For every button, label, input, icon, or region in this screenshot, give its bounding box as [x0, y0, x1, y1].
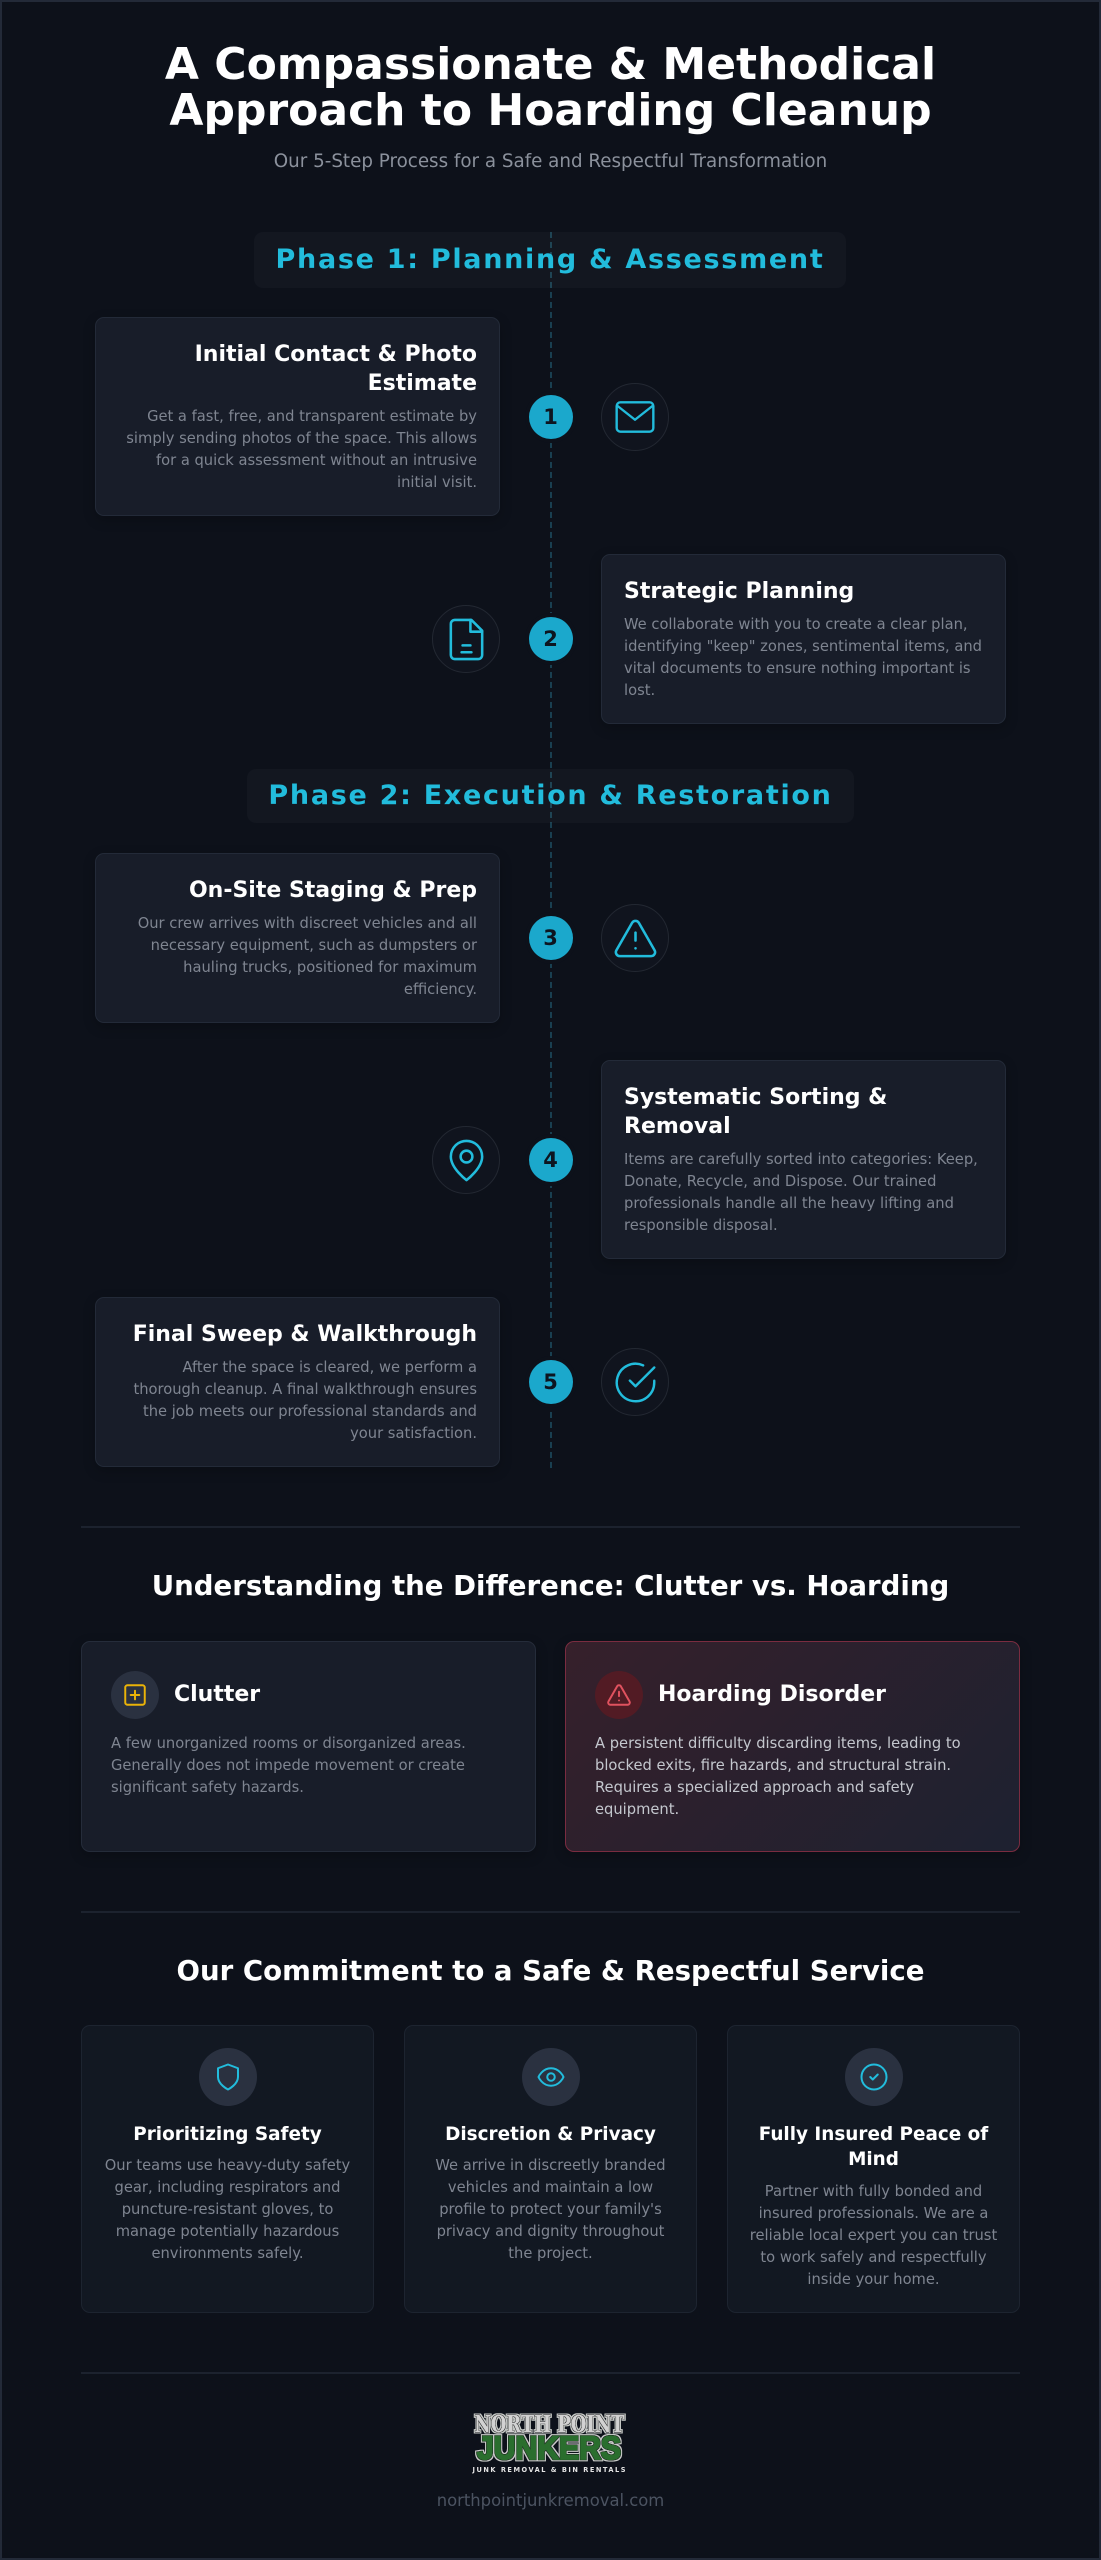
clutter text: Generally does not impede movement or create — [111, 1757, 465, 1774]
step 4 card: professionals handle all the heavy lifting and — [624, 1195, 954, 1212]
panel: clutter — [81, 1641, 536, 1852]
step 2 card: vital documents to ensure nothing important is — [624, 660, 971, 677]
step 3 card — [95, 853, 500, 1023]
step 2 card: We collaborate with you to create a clear plan, — [624, 616, 968, 633]
step 2 card — [601, 554, 1006, 724]
icon: map pin — [432, 1126, 500, 1194]
step 1 card: initial visit. — [397, 474, 477, 491]
discretion text: We arrive in discreetly branded — [435, 2157, 666, 2174]
safety text: Our teams use heavy-duty safety — [105, 2157, 350, 2174]
logo: JUNK REMOVAL & BIN RENTALS — [472, 2466, 626, 2474]
step 5 card: your satisfaction. — [350, 1425, 477, 1442]
discretion heading: Discretion & Privacy — [445, 2124, 656, 2145]
step 4 card: Systematic Sorting & — [624, 1085, 887, 1110]
clutter heading: Clutter — [174, 1682, 260, 1707]
discretion text — [435, 2157, 666, 2262]
timeline dashed line — [550, 232, 552, 1468]
phase 2 heading — [247, 769, 854, 823]
insured heading: Fully Insured Peace of — [759, 2124, 988, 2145]
logo: JUNKERS — [477, 2430, 621, 2466]
step 4 card: responsible disposal. — [624, 1217, 778, 1234]
discretion text: vehicles and maintain a low — [448, 2179, 653, 2196]
step 5 card: the job meets our professional standards and — [143, 1403, 477, 1420]
icon: shield — [198, 2048, 256, 2106]
panel: hoarding disorder — [565, 1641, 1020, 1852]
step 5 card: Final Sweep & Walkthrough — [133, 1322, 477, 1347]
panel: prioritizing safety — [81, 2025, 374, 2313]
step 2 card: identifying "keep" zones, sentimental items, and — [624, 638, 982, 655]
safety text — [105, 2157, 350, 2262]
panel: discretion — [404, 2025, 697, 2313]
insured text: to work safely and respectfully — [760, 2248, 987, 2266]
step 3 card: necessary equipment, such as dumpsters or — [151, 937, 477, 954]
insured heading — [759, 2124, 988, 2170]
logo — [472, 2411, 626, 2474]
step 5 number — [528, 1360, 572, 1404]
step 5 card: After the space is cleared, we perform a — [182, 1359, 477, 1376]
hoarding heading: Hoarding Disorder — [658, 1682, 886, 1707]
step 3 card: efficiency. — [404, 981, 477, 998]
title — [165, 39, 936, 136]
discretion text: privacy and dignity throughout — [437, 2223, 664, 2240]
safety text: environments safely. — [151, 2245, 304, 2262]
heading: commitment: Our Commitment to a Safe & Respectful Service — [177, 1954, 924, 1987]
step 1 card: Initial Contact & Photo — [195, 342, 477, 367]
step 2 card: Strategic Planning — [624, 579, 854, 604]
icon: warning triangle — [601, 904, 669, 972]
step 5 card: thorough cleanup. A final walkthrough ensures — [133, 1381, 477, 1398]
heading: clutter vs hoarding: Understanding the Difference: Clutter vs. Hoarding — [152, 1569, 949, 1602]
step 1 card — [95, 317, 500, 516]
icon: eye — [522, 2048, 580, 2106]
safety heading: Prioritizing Safety — [133, 2124, 322, 2145]
hoarding text — [595, 1735, 961, 1818]
icon: envelope — [601, 383, 669, 451]
panel: insured — [727, 2025, 1020, 2313]
insured text: inside your home. — [807, 2270, 940, 2288]
safety text: manage potentially hazardous — [116, 2223, 339, 2240]
phase 2 heading: Phase 2: Execution & Restoration — [268, 780, 833, 810]
icon: red warning — [595, 1671, 643, 1719]
clutter text: A few unorganized rooms or disorganized areas. — [111, 1735, 466, 1752]
discretion text: profile to protect your family's — [439, 2201, 662, 2218]
phase 1 heading: Phase 1: Planning & Assessment — [276, 244, 824, 274]
step 1 card: simply sending photos of the space. This allows — [126, 430, 477, 447]
step 4 card — [601, 1060, 1006, 1259]
step 3 card: On-Site Staging & Prep — [189, 878, 477, 903]
subtitle: Our 5-Step Process for a Safe and Respectful Transformation — [274, 151, 827, 172]
insured heading: Mind — [848, 2149, 899, 2170]
icon: plus square — [111, 1671, 159, 1719]
step 3 card: hauling trucks, positioned for maximum — [183, 959, 477, 976]
icon: check badge — [844, 2048, 902, 2106]
icon: document — [432, 605, 500, 673]
safety text: gear, including respirators and — [115, 2179, 340, 2196]
step 1 card: Estimate — [368, 371, 477, 396]
insured text: Partner with fully bonded and — [765, 2182, 982, 2200]
step 4 card: Removal — [624, 1114, 731, 1139]
insured text: insured professionals. We are a — [759, 2204, 988, 2222]
step 1 card: Get a fast, free, and transparent estimate by — [147, 408, 477, 425]
icon: check circle — [601, 1348, 669, 1416]
step 4 number: 4 — [543, 1148, 558, 1172]
clutter text: significant safety hazards. — [111, 1779, 304, 1796]
step 4 card: Items are carefully sorted into categories: Keep, — [624, 1151, 978, 1168]
step 3 card: Our crew arrives with discreet vehicles and all — [138, 915, 477, 932]
step 5 card — [95, 1297, 500, 1467]
step 1 number: 1 — [543, 405, 558, 429]
step 2 card: lost. — [624, 682, 655, 699]
title: A Compassionate & Methodical — [165, 39, 936, 90]
step 1 card: for a quick assessment without an intrusive — [156, 452, 477, 469]
title: Approach to Hoarding Cleanup — [169, 85, 932, 136]
step 4 number — [528, 1138, 572, 1182]
safety text: puncture-resistant gloves, to — [122, 2201, 333, 2218]
step 4 card: Donate, Recycle, and Dispose. Our trained — [624, 1173, 936, 1190]
discretion text: the project. — [508, 2245, 593, 2262]
hoarding text: equipment. — [595, 1801, 679, 1818]
clutter text — [111, 1735, 466, 1796]
step 5 number: 5 — [543, 1370, 558, 1394]
step 2 number: 2 — [543, 627, 558, 651]
step 3 number — [528, 916, 572, 960]
step 2 number — [528, 617, 572, 661]
step 3 number: 3 — [543, 926, 558, 950]
step 1 number — [528, 395, 572, 439]
hoarding text: blocked exits, fire hazards, and structural strain. — [595, 1757, 951, 1774]
hoarding text: A persistent difficulty discarding items, leading to — [595, 1735, 961, 1752]
website url: northpointjunkremoval.com — [437, 2491, 664, 2510]
phase 1 heading — [254, 232, 846, 288]
insured text: reliable local expert you can trust — [750, 2226, 997, 2244]
insured text — [750, 2182, 997, 2288]
hoarding text: Requires a specialized approach and safety — [595, 1779, 914, 1796]
